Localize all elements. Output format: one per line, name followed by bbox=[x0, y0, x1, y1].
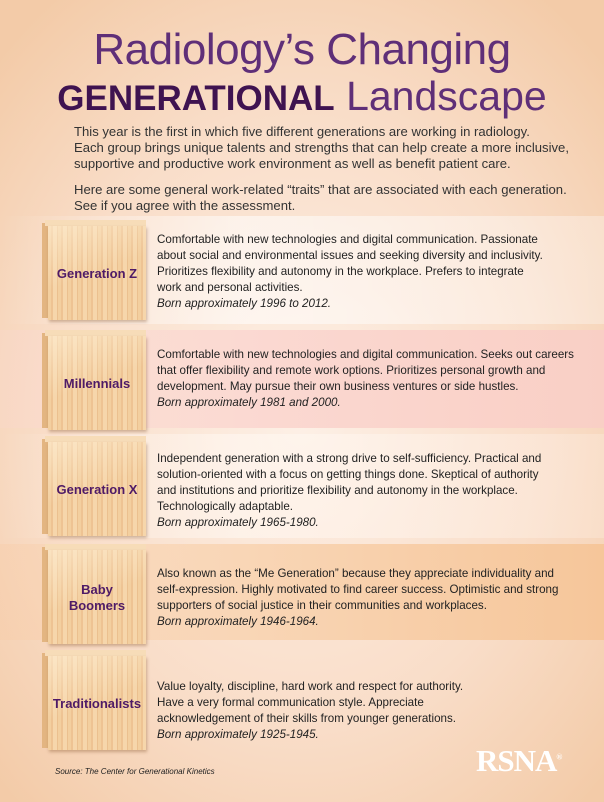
text: traditionalists: Have a very formal communication style. Appreciate bbox=[157, 696, 424, 709]
block: baby boomers: Baby bbox=[81, 582, 113, 597]
block: generation x: Generation X bbox=[57, 482, 137, 497]
intro text 2 bbox=[74, 182, 567, 213]
text: generation x: solution-oriented with a focus on getting things done. Skeptical of authority bbox=[157, 468, 539, 481]
text: traditionalists: acknowledgement of their skills from younger generations. bbox=[157, 712, 456, 725]
band: boomers bbox=[0, 544, 604, 640]
text: millennials: development. May pursue their own business ventures or side hustles. bbox=[157, 380, 519, 393]
text: generation z: about social and environmental issues and seeking diversity and inclusivity. bbox=[157, 249, 543, 262]
text: generation x bbox=[157, 452, 541, 529]
block: baby boomers bbox=[42, 547, 148, 648]
text: baby boomers: supporters of social justice in their communities and workplaces. bbox=[157, 599, 487, 612]
block: baby boomers: Boomers bbox=[69, 598, 125, 613]
band: gen z bbox=[0, 216, 604, 324]
intro text bbox=[74, 124, 569, 171]
block: millennials bbox=[42, 330, 149, 434]
text: traditionalists bbox=[157, 680, 463, 741]
text: generation x: Born approximately 1965-1980. bbox=[157, 516, 319, 529]
text: generation z: work and personal activities. bbox=[157, 281, 303, 294]
text: generation z: Comfortable with new technologies and digital communication. Passionate bbox=[157, 233, 538, 246]
block: traditionalists bbox=[42, 650, 148, 754]
title: Radiology’s Changing bbox=[93, 25, 511, 74]
band: gen x bbox=[0, 434, 604, 538]
block: generation z bbox=[42, 220, 149, 324]
intro text: Each group brings unique talents and strengths that can help create a more inclusive, bbox=[74, 140, 569, 155]
block: traditionalists: Traditionalists bbox=[53, 696, 141, 711]
text: generation z: Born approximately 1996 to 2012. bbox=[157, 297, 331, 310]
text: baby boomers: Born approximately 1946-1964. bbox=[157, 615, 319, 628]
intro text: supportive and productive work environment as well as benefit patient care. bbox=[74, 156, 511, 171]
source: Source: The Center for Generational Kinetics bbox=[55, 767, 215, 776]
text: baby boomers: self-expression. Highly motivated to find career success. Optimistic and strong bbox=[157, 583, 558, 596]
text: millennials: that offer flexibility and remote work options. Prioritizes personal growth and bbox=[157, 364, 545, 377]
band: millennials bbox=[0, 330, 604, 428]
text: generation x: Independent generation with a strong drive to self-sufficiency. Practical and bbox=[157, 452, 541, 465]
text: generation z bbox=[157, 233, 543, 310]
intro text 2: Here are some general work-related “traits” that are associated with each generation. bbox=[74, 182, 567, 197]
text: millennials: Born approximately 1981 and 2000. bbox=[157, 396, 341, 409]
intro text 2: See if you agree with the assessment. bbox=[74, 198, 295, 213]
subtitle: GENERATIONAL Landscape bbox=[57, 73, 547, 119]
text: traditionalists: Value loyalty, discipline, hard work and respect for authority. bbox=[157, 680, 463, 693]
text: millennials bbox=[157, 348, 574, 409]
block: generation x bbox=[42, 436, 149, 540]
text: baby boomers: Also known as the “Me Generation” because they appreciate individuality and bbox=[157, 567, 554, 580]
logo: RSNA: RSNA® bbox=[476, 743, 561, 778]
text: generation x: and institutions and prioritize flexibility and autonomy in the workplace. bbox=[157, 484, 518, 497]
text: generation x: Technologically adaptable. bbox=[157, 500, 293, 513]
text: generation z: Prioritizes flexibility and autonomy in the workplace. Prefers to integrate bbox=[157, 265, 524, 278]
block: generation z: Generation Z bbox=[57, 266, 137, 281]
block: millennials: Millennials bbox=[64, 376, 130, 391]
intro text: This year is the first in which five different generations are working in radiology. bbox=[74, 124, 530, 139]
text: traditionalists: Born approximately 1925-1945. bbox=[157, 728, 319, 741]
text: baby boomers bbox=[157, 567, 558, 628]
text: millennials: Comfortable with new technologies and digital communication. Seeks out careers bbox=[157, 348, 574, 361]
